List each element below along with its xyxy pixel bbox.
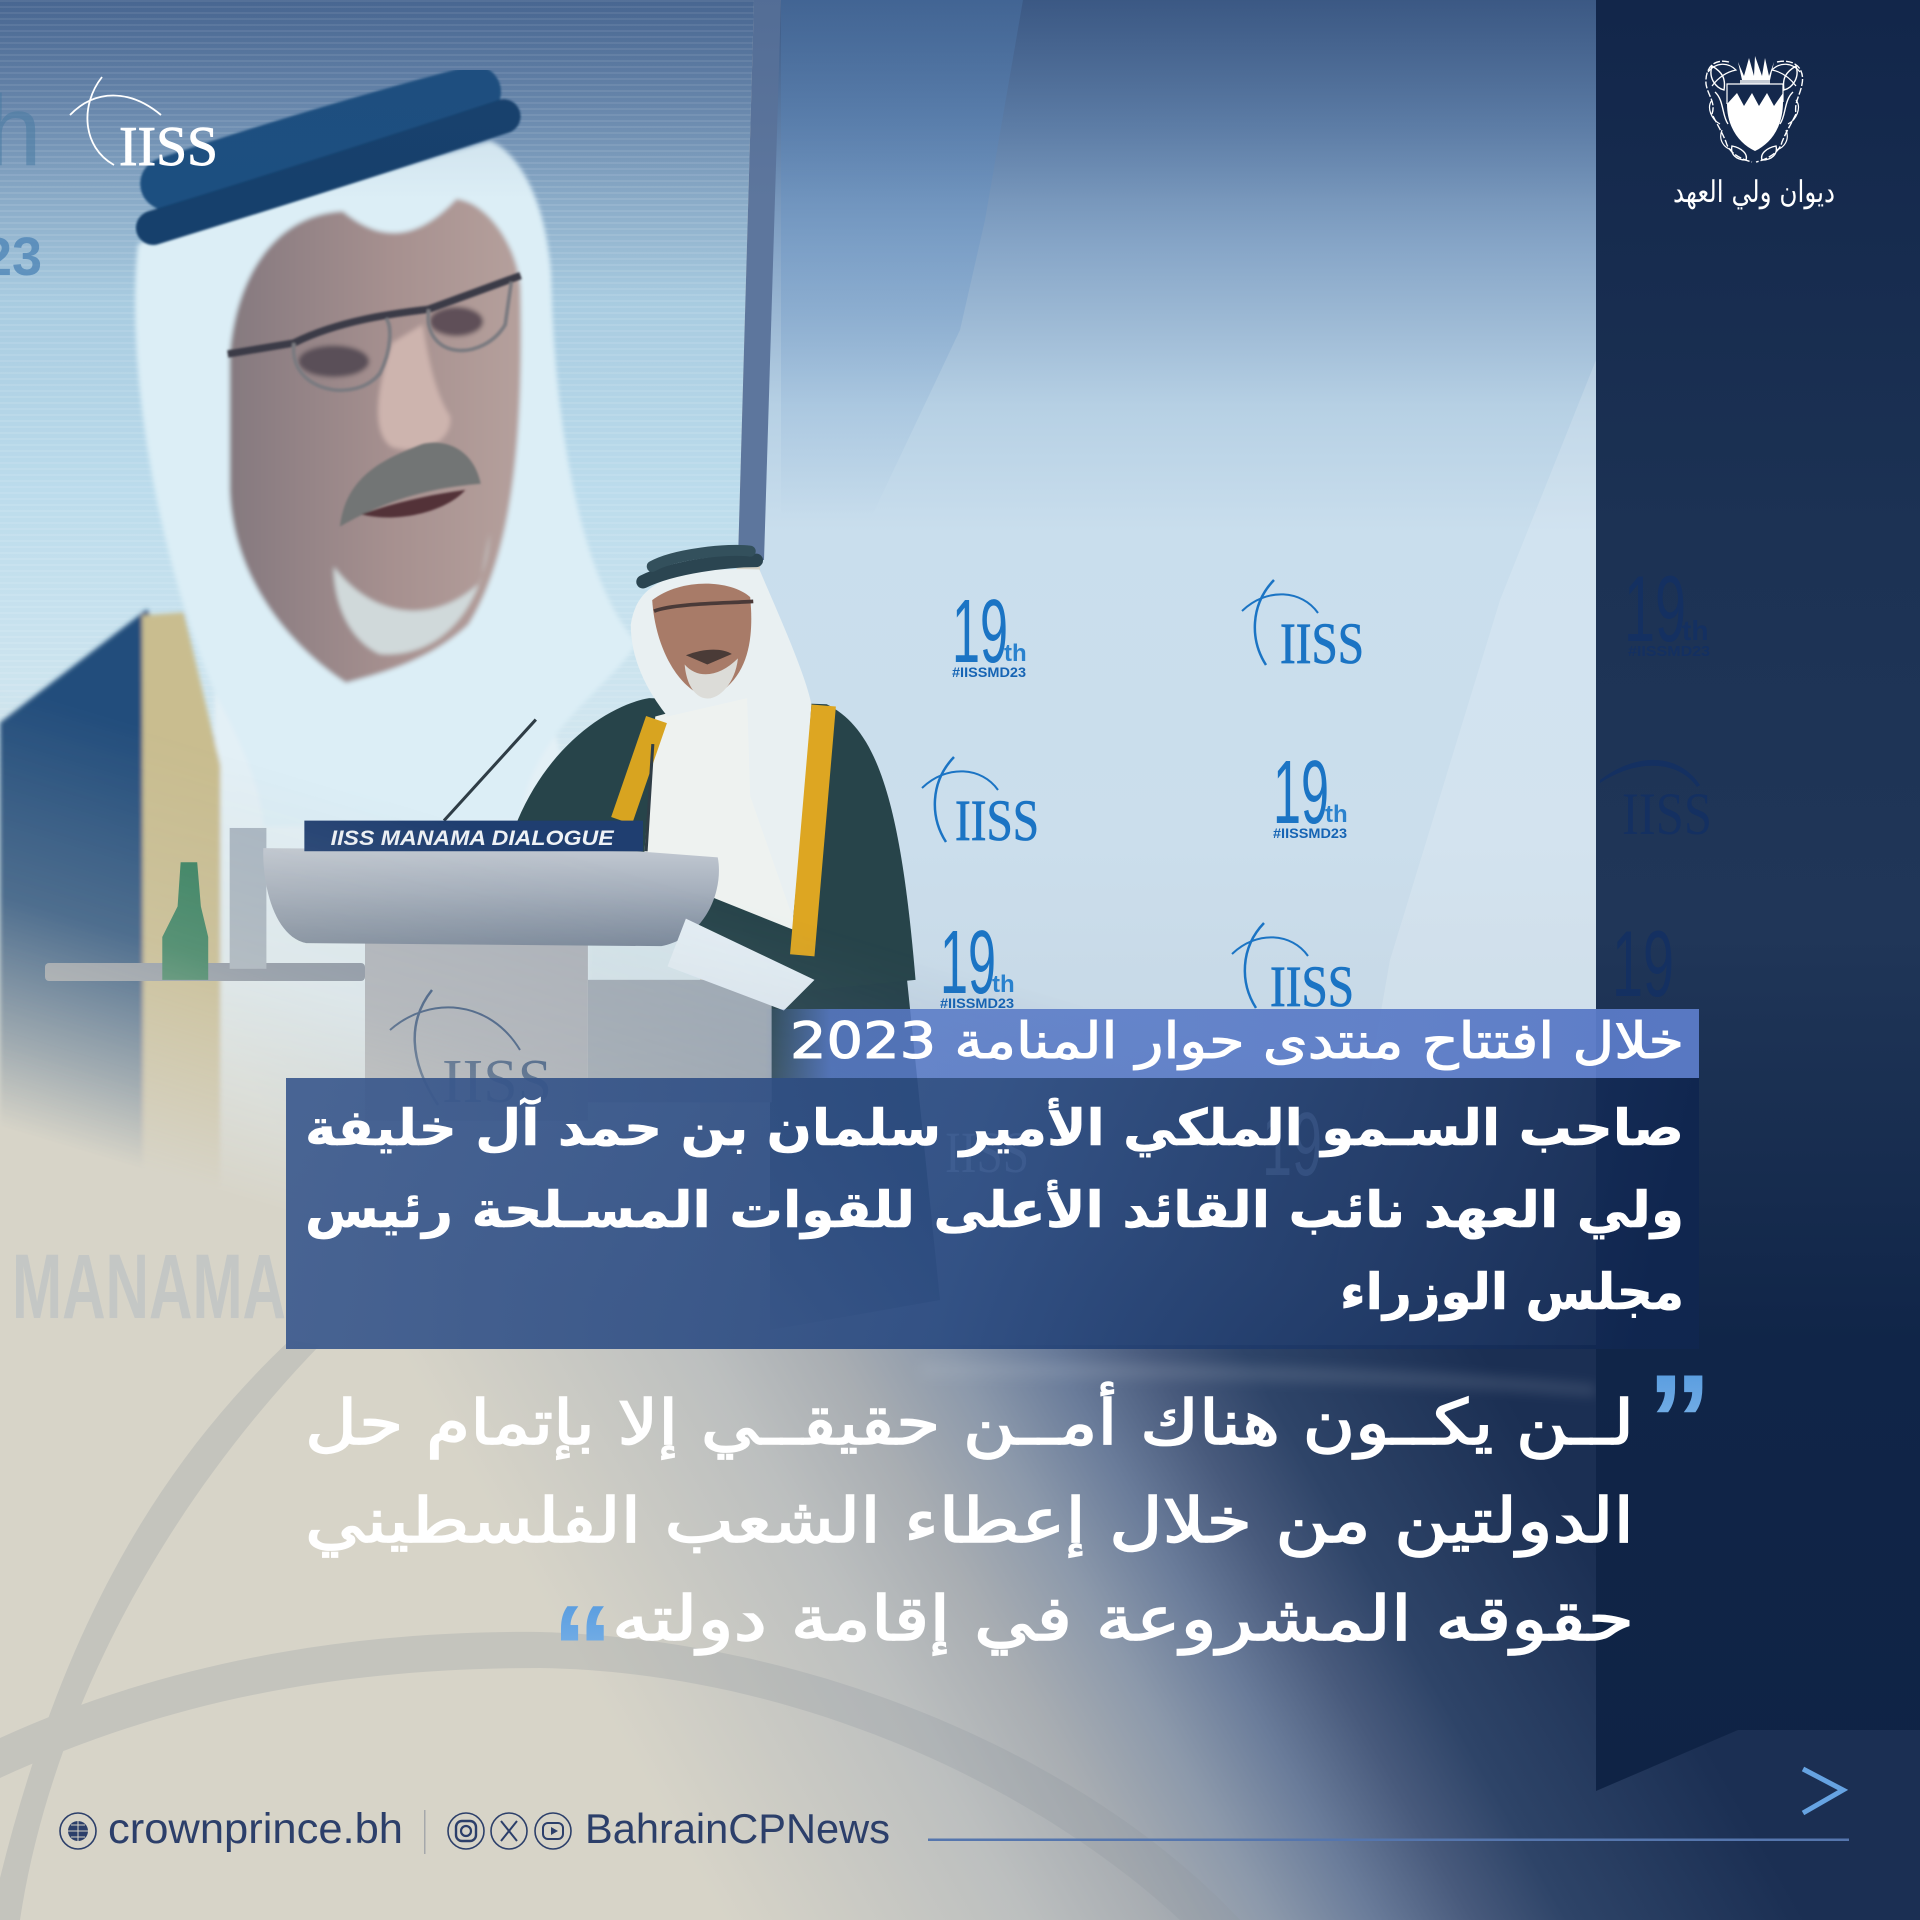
speaker robe (517, 698, 916, 992)
logo: Crown Prince court emblem (1673, 56, 1835, 210)
screen beard (334, 533, 490, 654)
wall logo: IISS row 1 right: IISS (1280, 611, 1364, 676)
lighter wall panel (1330, 360, 1596, 1300)
wall logo: IISS row 1 right (1242, 580, 1364, 676)
faint arc (1600, 760, 1700, 787)
top dark tint (0, 0, 1920, 200)
backdrop wall (760, 0, 1920, 1400)
wall logo: 19th row 2 right: #IISSMD23 (1273, 825, 1347, 841)
green bottle (162, 862, 208, 980)
faint IISS middle: IISS (1622, 781, 1712, 847)
footer (60, 1805, 890, 1854)
speaker moustache (686, 650, 732, 664)
wall logo: IISS row 2 left: IISS (955, 788, 1039, 853)
faint 19th upper: 19 (1624, 556, 1686, 661)
quote line 2: الدولتين من خلال إعطاء الشعب الفلسطيني (305, 1484, 1634, 1558)
speaker face (652, 584, 751, 698)
podium top (263, 848, 719, 946)
clear bottle (230, 828, 266, 969)
screen eye left (298, 345, 369, 377)
screen nose (378, 325, 450, 450)
screen ghutra (135, 141, 637, 827)
event banner background (765, 1009, 1699, 1078)
crown (1738, 56, 1774, 80)
speaker figure (162, 550, 916, 1121)
quote line 1: لــن يكــون هناك أمــن حقيقــي إلا بإتمام حل (305, 1382, 1634, 1460)
speaker glasses (654, 601, 753, 611)
crown band (1740, 80, 1770, 84)
wall logo: IISS row 3 right (1232, 923, 1354, 1019)
website: crownprince.bh (108, 1805, 403, 1853)
screen mouth (361, 490, 465, 518)
icon: globe (60, 1813, 96, 1849)
faint logos on panel (1600, 556, 1712, 1016)
wall logo: 19th row 1 left: 19 (952, 582, 1008, 682)
quotation (305, 1347, 1712, 1716)
stage table (45, 963, 365, 981)
faint 19th upper: #IISSMD23 (1628, 643, 1710, 660)
event banner text: خلال افتتاح منتدى حوار المنامة 2023 (790, 1012, 1684, 1070)
band behind quote (920, 1362, 1596, 1396)
grey lectern side (588, 980, 772, 1102)
screen glasses (228, 276, 521, 354)
nameplate: IISS MANAMA DIALOGUE (331, 827, 615, 850)
screen white thobe (214, 625, 588, 1298)
logo: IISS (70, 77, 218, 178)
footer separator (424, 1810, 426, 1854)
icon: instagram (448, 1813, 484, 1849)
right navy side panel (1596, 0, 1920, 1791)
speaker gold trim left (622, 720, 656, 821)
shield outline (1727, 84, 1783, 104)
LED scan lines (0, 0, 754, 800)
podium stem (365, 937, 588, 1121)
screen gold trim (142, 612, 220, 1255)
wall logo: 19th row 1 left: #IISSMD23 (952, 664, 1026, 680)
microphones (444, 720, 653, 851)
name and title panel (286, 1078, 1699, 1349)
wall logo: 19th row 3 left: 19 (940, 913, 996, 1013)
name panel background (286, 1078, 1699, 1349)
speaker agal upper (643, 560, 756, 582)
lectern IISS logo: IISS (442, 1048, 552, 1116)
icon: youtube (535, 1813, 571, 1849)
bottom beige-to-navy gradient overlay (0, 724, 1920, 1920)
speaker agal lower (652, 550, 750, 566)
IISS globe arcs (70, 77, 161, 165)
screen face (230, 199, 521, 683)
social handle: BahrainCPNews (585, 1805, 890, 1852)
faint 19th lower: 19 (1612, 911, 1674, 1016)
wall logo: 19th row 1 left: th (1004, 640, 1027, 667)
speaker ghutra (631, 569, 811, 919)
photo fade (0, 724, 832, 1330)
wall logo: 19th row 3 left: #IISSMD23 (940, 995, 1014, 1011)
faint 19th upper: th (1682, 615, 1708, 646)
name line 3: مجلس الوزراء (1340, 1263, 1684, 1322)
vertical globe arc (0, 1340, 320, 1920)
IISS wordmark: IISS (119, 116, 218, 178)
name line 1: صاحب السـمو الملكي الأمير سلمان بن حمد آل خليفة (305, 1097, 1684, 1158)
wall logo: IISS row 2 left (922, 757, 1039, 853)
wall logo: 19th row 2 right: 19 (1273, 743, 1329, 843)
screen lenses (294, 282, 511, 390)
screen MANAMA backdrop text: MANAMA (12, 1236, 286, 1338)
speaker thobe (643, 692, 796, 931)
screen frame (738, 0, 781, 560)
watermark globe arcs (0, 1340, 1240, 1920)
horizontal globe arc (0, 1632, 1240, 1920)
arrow: next (1803, 1769, 1843, 1813)
lectern IISS logo (390, 990, 552, 1116)
wall logo: IISS row 3 right: IISS (1270, 954, 1354, 1019)
photo background: stage, LED screen and speaker (0, 0, 1920, 1400)
blue wall band (781, 0, 1023, 520)
foliage wreath (1706, 61, 1803, 162)
lower robe of speaker (770, 960, 940, 1330)
quote line 3: حقوقه المشروعة في إقامة دولته (612, 1582, 1634, 1656)
shield (1727, 93, 1783, 151)
screen eye right (429, 307, 483, 336)
footer rule (928, 1838, 1849, 1841)
faint IISS behind panel: IISS (945, 1120, 1029, 1185)
wall logo: 19th row 3 left: th (992, 971, 1015, 998)
closing quote mark: “ (552, 1580, 613, 1716)
LED screen (0, 0, 754, 1300)
opening quote mark: ” (1647, 1347, 1712, 1493)
Crown Prince court wordmark: ديوان ولي العهد (1673, 175, 1835, 210)
speaker beard (685, 658, 738, 699)
solid lower gradient (0, 1345, 1920, 1920)
screen agal lower (153, 116, 503, 228)
icon: X (491, 1813, 527, 1849)
lectern tablet (668, 919, 814, 1010)
big on-screen portrait (0, 92, 637, 1298)
screen robe (0, 609, 263, 1298)
screen moustache (340, 443, 481, 527)
faint 19th behind panel: 19 (1262, 1095, 1322, 1195)
speaker gold trim right (802, 705, 824, 955)
nameplate (304, 821, 643, 851)
event banner (765, 1009, 1699, 1078)
name line 2: ولي العهد نائب القائد الأعلى للقوات المسـلحة رئيس (305, 1179, 1684, 1240)
wall logo: 19th row 2 right: th (1325, 801, 1348, 828)
screen agal upper (167, 92, 475, 184)
